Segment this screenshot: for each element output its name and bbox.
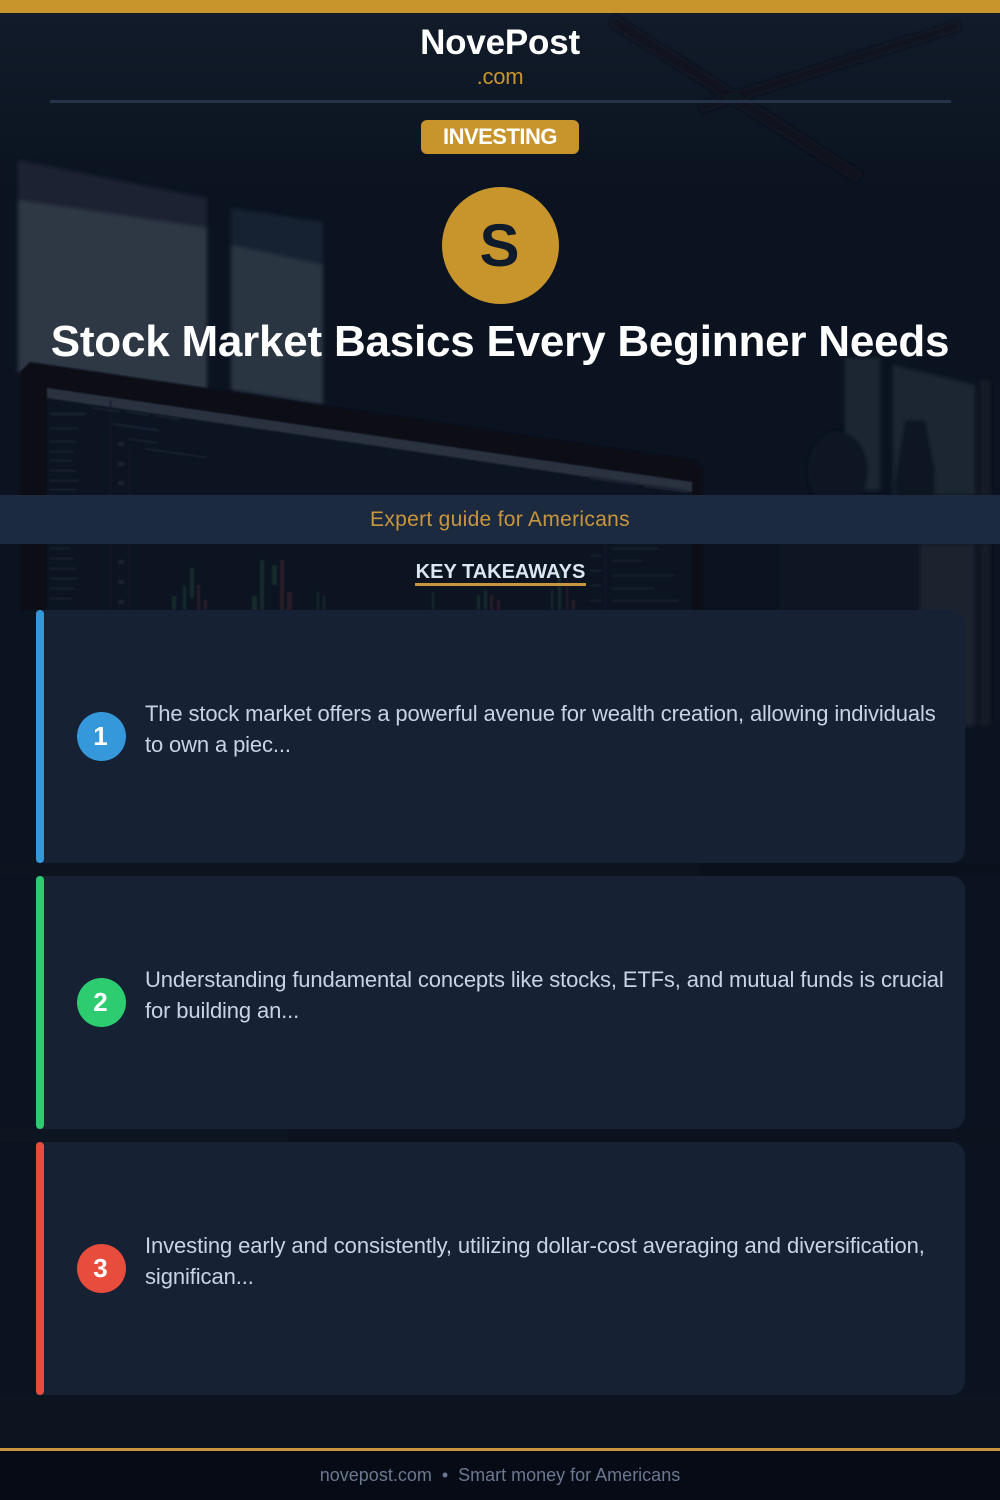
icon: letter S circle xyxy=(442,187,559,304)
icon: letter S circle: S xyxy=(479,212,520,279)
number badge 1 xyxy=(77,712,126,761)
category badge: INVESTING xyxy=(443,124,557,149)
footer: novepost.com • Smart money for Americans xyxy=(320,1465,680,1485)
site suffix: .com xyxy=(477,64,523,89)
section heading: key takeaways: KEY TAKEAWAYS xyxy=(416,561,585,583)
number badge 3 xyxy=(77,1244,126,1293)
number badge 2 xyxy=(77,978,126,1027)
panel: takeaway 2 xyxy=(36,876,965,1129)
site name: NovePost xyxy=(420,23,580,62)
panel: takeaway 1 xyxy=(36,610,965,863)
footer xyxy=(0,1448,1000,1500)
takeaway 1 text: The stock market offers a powerful avenue for wealth creation, allowing individuals to own a piec... xyxy=(145,701,936,757)
top accent bar xyxy=(0,0,1000,13)
number badge 1: 1 xyxy=(93,721,108,751)
number badge 3: 3 xyxy=(93,1253,108,1283)
subtitle band: Expert guide for Americans xyxy=(370,508,630,531)
title: Stock Market Basics Every Beginner Needs xyxy=(51,317,949,366)
panel: takeaway 3 xyxy=(36,1142,965,1395)
number badge 2: 2 xyxy=(93,987,108,1017)
subtitle band xyxy=(0,495,1000,544)
category badge xyxy=(421,120,579,154)
takeaway 2 text: Understanding fundamental concepts like stocks, ETFs, and mutual funds is crucial for building an... xyxy=(145,967,944,1023)
takeaway 3 text: Investing early and consistently, utilizing dollar-cost averaging and diversification, significan... xyxy=(145,1233,925,1289)
